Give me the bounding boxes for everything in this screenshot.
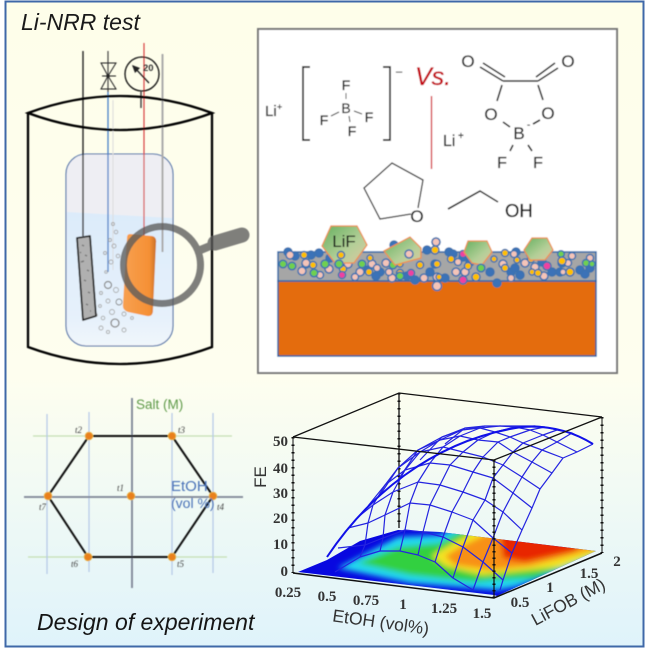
LiFOB structure <box>443 52 575 172</box>
LiFOB axis ticks: 1 <box>546 580 554 596</box>
SEI layer <box>278 252 596 281</box>
THF ring <box>364 163 424 226</box>
axes <box>24 398 243 588</box>
FE axis ticks: 50 <box>273 434 288 450</box>
LiFOB structure: F <box>533 155 543 172</box>
LiBF4 structure: F <box>348 123 356 139</box>
icon: magnifier <box>124 226 242 304</box>
FE axis ticks: 0 <box>280 564 288 580</box>
LiFOB structure: B <box>513 124 525 143</box>
EtOH axis ticks: 0.25 <box>275 585 301 601</box>
surface mesh <box>327 426 593 590</box>
chart front edges <box>293 417 602 598</box>
EtOH axis ticks: 0.5 <box>318 589 336 605</box>
Vs. label and divider: Vs. <box>415 63 451 91</box>
axis labels: Salt (M) <box>136 397 183 412</box>
grid lines <box>28 412 232 575</box>
reference and gas rods <box>83 43 162 272</box>
LiF crystals <box>322 226 553 265</box>
EtOH axis title: EtOH (vol%) <box>331 605 430 639</box>
point labels: t4 <box>217 502 225 512</box>
FE axis ticks: 20 <box>273 511 288 527</box>
orange working electrode <box>123 234 156 316</box>
LiFOB axis ticks <box>511 554 621 611</box>
beaker outline <box>28 96 212 364</box>
FE axis ticks <box>273 434 288 580</box>
particles over LiF <box>335 238 485 272</box>
LiFOB structure: O <box>561 52 575 71</box>
icon: dial gauge: 20 <box>143 63 154 74</box>
point labels: t7 <box>39 502 47 512</box>
LiF label: LiF <box>332 232 356 251</box>
LiFOB axis ticks: 1.5 <box>580 566 598 582</box>
LiFOB structure: O <box>484 105 498 124</box>
LiFOB structure: O <box>541 104 555 123</box>
electrochemical cell illustration <box>28 43 242 364</box>
3D surface chart <box>251 393 621 639</box>
point labels: t6 <box>71 559 79 569</box>
icon: valve <box>101 63 116 89</box>
point labels: t2 <box>75 425 83 435</box>
EtOH axis ticks: 1.5 <box>473 606 491 622</box>
FE axis ticks: 30 <box>273 486 288 502</box>
Vs. label and divider <box>415 63 451 169</box>
LiFOB structure: + <box>458 131 464 142</box>
FE axis ticks: 10 <box>273 537 288 553</box>
inner glass cell <box>66 154 173 346</box>
panel: electrolyte chemistry and SEI <box>258 29 617 373</box>
LiFOB structure: Li <box>443 133 455 150</box>
ethanol <box>448 191 533 221</box>
LiBF4 structure: F <box>320 112 328 128</box>
LiBF4 structure: F <box>365 109 373 125</box>
FE axis ticks: 40 <box>273 461 288 477</box>
chart back edges <box>293 393 602 573</box>
LiBF4 structure <box>265 66 403 140</box>
point labels: t3 <box>178 425 186 435</box>
hexagon <box>48 436 213 557</box>
LiBF4 structure: B <box>341 100 351 116</box>
icon: dial gauge <box>125 57 159 108</box>
EtOH axis ticks: 1.25 <box>431 601 457 617</box>
hexagonal design diagram <box>24 397 243 588</box>
point labels: t5 <box>177 559 185 569</box>
LiBF4 structure: Li <box>265 103 277 120</box>
LiBF4 structure: – <box>396 66 403 78</box>
LiBF4 structure: F <box>342 77 350 93</box>
LiFOB structure: O <box>461 52 475 71</box>
LiFOB structure: - <box>527 120 530 131</box>
LiBF4 structure: + <box>277 102 282 112</box>
THF ring: O <box>410 207 424 226</box>
LiFOB axis ticks: 0.5 <box>511 595 529 611</box>
grey counter electrode <box>77 236 96 320</box>
heading: Li-NRR test: Li-NRR test <box>21 9 141 35</box>
icon: gas bubbles <box>95 222 133 334</box>
LiFOB structure: F <box>497 155 507 172</box>
design points <box>44 432 217 561</box>
EtOH axis ticks: 1 <box>399 597 407 613</box>
copper substrate <box>278 281 596 356</box>
EtOH axis ticks: 0.75 <box>353 593 379 609</box>
ethanol: OH <box>505 200 533 221</box>
LiFOB axis ticks: 2 <box>613 554 621 570</box>
hexagonal design diagram: (vol %) <box>171 495 215 511</box>
heat map floor <box>298 530 596 596</box>
point labels: t1 <box>117 483 124 493</box>
point labels <box>39 425 225 569</box>
FE axis title: FE <box>251 466 270 488</box>
EtOH axis ticks <box>275 585 491 622</box>
LiFOB axis title: LiFOB (M) <box>528 574 609 629</box>
SEI particles <box>279 238 595 290</box>
heading: Design of experiment: Design of experiment <box>37 609 256 635</box>
hexagonal design diagram: EtOH <box>171 478 208 495</box>
